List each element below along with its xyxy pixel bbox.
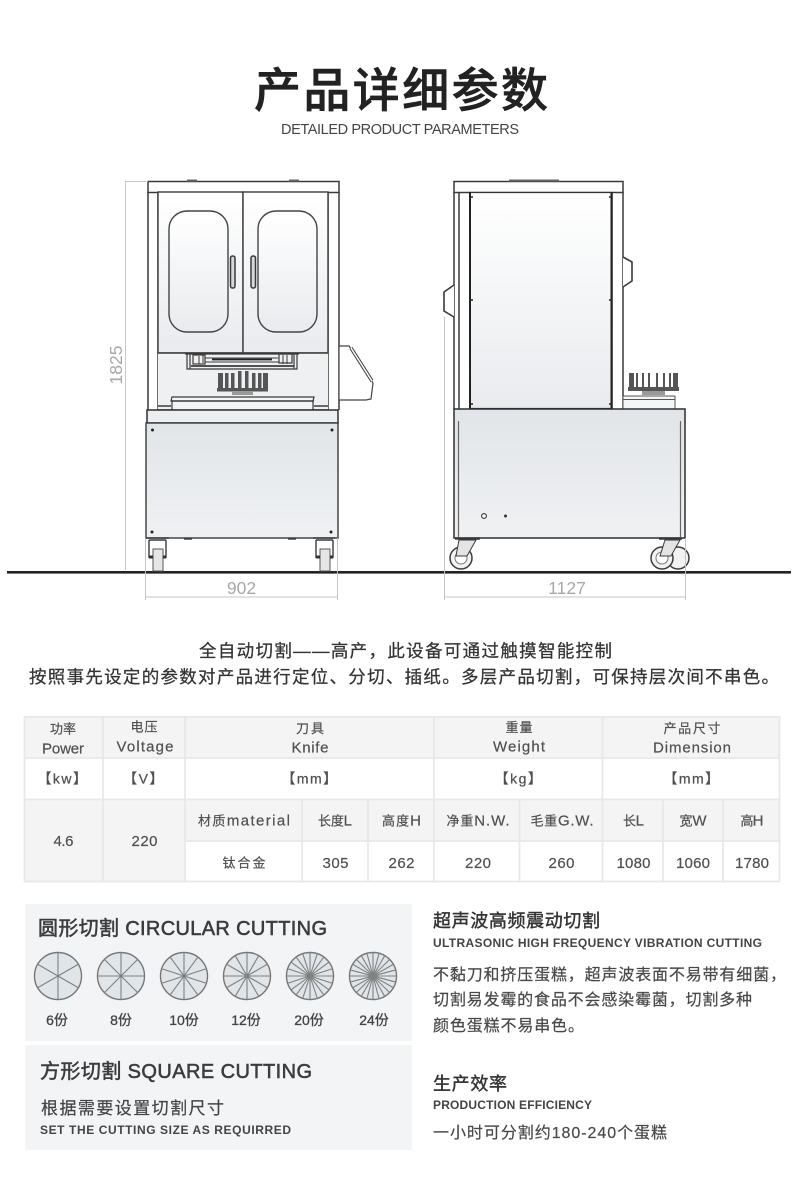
circular cutting heading: 圆形切割 CIRCULAR CUTTING (38, 917, 327, 940)
front view: left caster (146, 538, 169, 571)
square cutting description: 根据需要设置切割尺寸 (41, 1099, 224, 1118)
height dimension (106, 181, 148, 570)
table header row: 产品尺寸 (664, 721, 720, 736)
table value row: 1780 (735, 855, 769, 872)
front view: control panel (339, 346, 373, 400)
table value row: 260 (548, 855, 574, 872)
efficiency heading: 生产效率 (433, 1074, 507, 1094)
table header row: Voltage (116, 738, 174, 756)
table sub-header row: 长L (623, 812, 644, 830)
table sub-header row: 高度H (382, 812, 421, 830)
table sub-header row: 宽W (680, 812, 707, 830)
slice count labels: 10份 (169, 1012, 199, 1028)
table value row: 305 (322, 855, 348, 872)
icon: 8 slices (98, 952, 144, 1000)
table sub-header row: 材质material (198, 812, 290, 830)
side view: power port (482, 514, 486, 518)
ultrasonic description (433, 966, 786, 1035)
side view: right casters (651, 538, 689, 569)
width value: 902 (227, 578, 256, 598)
panel: square cutting (25, 1045, 412, 1150)
slice count labels: 20份 (294, 1012, 324, 1028)
table header row: Power (42, 740, 84, 758)
slice count labels: 8份 (110, 1012, 132, 1028)
table unit row: 【mm】 (281, 770, 339, 786)
side view: switch (504, 514, 507, 518)
width dimension 902 (146, 538, 338, 600)
table value row: 4.6 (54, 833, 74, 850)
front view machine diagram (146, 180, 373, 571)
front view: left door (158, 192, 243, 353)
intro text: 按照事先设定的参数对产品进行定位、分切、插纸。多层产品切割，可保持层次间不串色。 (29, 667, 779, 687)
square cutting heading: 方形切割 SQUARE CUTTING (40, 1060, 312, 1083)
table header row: 电压 (130, 720, 158, 734)
icon: 20 slices (286, 952, 334, 1000)
side view: centre panel (470, 192, 612, 408)
front view: right caster (313, 538, 335, 571)
side view: frame posts (454, 192, 623, 409)
side view: cabinet (454, 409, 685, 538)
side view: left caster (450, 538, 480, 569)
icon: 6 slices (34, 952, 82, 1000)
table unit row: 【V】 (123, 770, 165, 786)
table value row: 220 (132, 833, 158, 850)
table header row: Knife (292, 740, 328, 756)
table header row: 功率 (50, 722, 76, 736)
table sub-header row (198, 812, 764, 830)
efficiency english heading: PRODUCTION EFFICIENCY (433, 1098, 592, 1112)
slice count labels: 12份 (231, 1012, 261, 1028)
side view machine diagram (444, 180, 689, 569)
front view: left window (169, 211, 228, 332)
side view: cutting table (623, 396, 675, 409)
table unit row: 【kg】 (495, 770, 543, 786)
table value row: 1080 (616, 855, 650, 872)
table unit row (37, 770, 721, 786)
front view: base bar (147, 410, 338, 423)
front view: right window (258, 211, 317, 332)
ultrasonic heading: 超声波高频震动切割 (433, 911, 600, 931)
ultrasonic english heading: ULTRASONIC HIGH FREQUENCY VIBRATION CUTTING (433, 936, 762, 950)
front view: right door (243, 192, 328, 353)
square cutting english description: SET THE CUTTING SIZE AS REQUIRRED (40, 1123, 291, 1137)
depth value: 1127 (548, 578, 586, 598)
table unit row: 【kw】 (37, 770, 89, 786)
ground line (7, 571, 791, 574)
side view: right handle (623, 257, 632, 287)
efficiency description: 一小时可分割约180-240个蛋糕 (433, 1124, 667, 1142)
icon: 24 slices (350, 952, 396, 1000)
side view: cutter blades (628, 373, 679, 395)
table value row: 262 (388, 855, 414, 872)
intro text (29, 641, 779, 687)
depth dimension 1127 (444, 317, 686, 600)
slice count labels: 6份 (46, 1012, 68, 1028)
table sub-header row: 长度L (318, 812, 352, 830)
specification table (24, 716, 780, 882)
subtitle: DETAILED PRODUCT PARAMETERS (281, 122, 519, 138)
ultrasonic description: 切割易发霉的食品不会感染霉菌，切割多种 (433, 991, 752, 1009)
front view: gantry (185, 354, 299, 369)
ultrasonic description: 颜色蛋糕不易串色。 (433, 1017, 584, 1035)
slice count labels (46, 1012, 389, 1028)
slice count labels: 24份 (359, 1012, 389, 1028)
table header row: Dimension (653, 740, 731, 756)
table value row: 220 (465, 855, 491, 872)
front view: lower bay (158, 353, 328, 410)
panel: circular cutting (25, 904, 412, 1041)
front view: door handles (230, 256, 256, 288)
icon: 12 slices (224, 952, 270, 1000)
production efficiency text block (433, 1074, 667, 1142)
table sub-header row: 高H (740, 812, 764, 830)
front view: cabinet (146, 423, 338, 538)
table header row: 重量 (506, 720, 532, 735)
table header row (42, 720, 731, 758)
front view: top bar (148, 182, 339, 192)
table value row: 1060 (676, 855, 710, 872)
front view: cutting table (171, 397, 314, 410)
intro text: 全自动切割——高产，此设备可通过触摸智能控制 (199, 641, 612, 661)
table unit row: 【mm】 (663, 770, 721, 786)
front view: frame posts (148, 192, 339, 410)
icon: 10 slices (160, 952, 208, 1000)
table header row: 刀具 (296, 721, 324, 736)
side view: left handle (444, 285, 454, 317)
table shaded cells (24, 716, 780, 882)
height value: 1825 (106, 346, 126, 384)
table value row (54, 833, 769, 872)
table value row: 钛合金 (222, 856, 266, 870)
table sub-header row: 毛重G.W. (530, 812, 594, 830)
title: 产品详细参数 (254, 64, 548, 117)
table grid (24, 716, 780, 882)
front view: cutter blades (217, 371, 268, 395)
ultrasonic description: 不黏刀和挤压蛋糕，超声波表面不易带有细菌， (433, 966, 786, 984)
table sub-header row: 净重N.W. (446, 812, 510, 830)
table header row: Weight (493, 738, 546, 756)
front view: cabinet screws (150, 428, 334, 534)
side view: top bar (454, 182, 623, 192)
ultrasonic cutting text block (433, 911, 786, 1035)
